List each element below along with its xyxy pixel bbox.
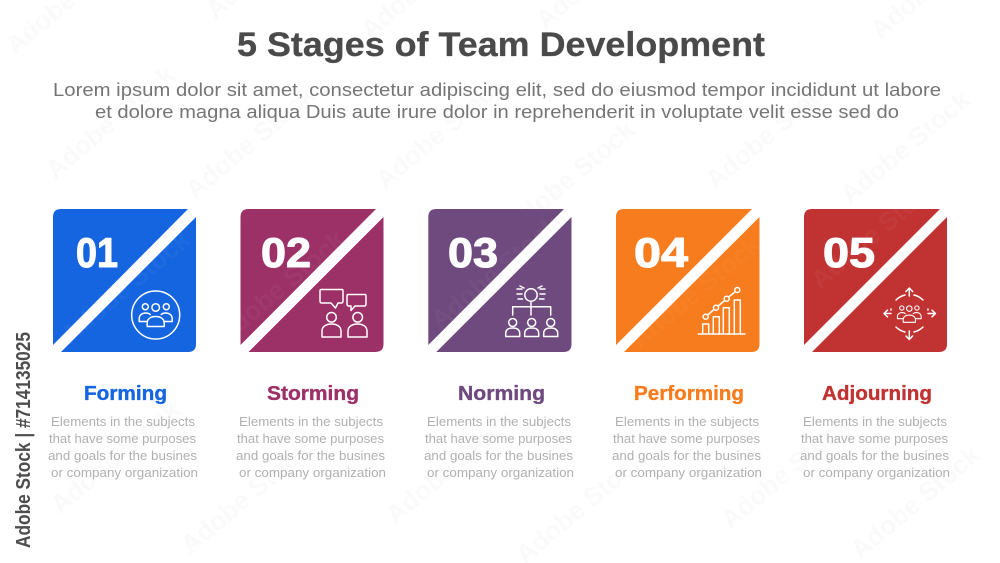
watermark over cards: Adobe Stock [55,224,196,350]
card 03 [428,209,572,352]
description: Adjourning: Elements in the subjects [803,414,948,429]
panel: stage 04 Performing [612,209,762,480]
subtitle text block: et dolore magna aliqua Duis aute irure dolor in reprehenderit in voluptate velit esse sed do [95,101,899,122]
description: Forming: that have some purposes [49,431,196,446]
description: Storming: and goals for the busines [236,448,385,463]
description: Storming: Elements in the subjects [239,414,384,429]
description: Forming: or company organization [51,465,198,480]
panel: stage 03 Norming [424,209,574,480]
description: Norming: and goals for the busines [424,448,573,463]
card 04 [616,209,760,352]
description: Storming: or company organization [239,465,386,480]
description: Norming: that have some purposes [425,431,572,446]
subtitle text block [53,79,941,122]
watermark over cards: Adobe Stock [625,229,766,355]
heading: Storming: Storming [267,383,359,405]
number 04: 04 [634,229,689,276]
heading: Performing: Performing [634,383,744,405]
heading: Adjourning: Adjourning [822,383,932,405]
panel: stage 01 Forming [48,209,198,480]
description: Adjourning: and goals for the busines [800,448,949,463]
card 02 [240,209,384,352]
watermark over cards: Adobe Stock [210,224,351,350]
number 03: 03 [448,229,498,276]
number 02: 02 [261,229,311,276]
description: Storming: that have some purposes [237,431,384,446]
description: Norming: or company organization [427,465,574,480]
description: Norming [424,414,574,480]
icon: leader and team [506,286,558,336]
icon: two people talking [320,290,367,337]
description: Norming: Elements in the subjects [427,414,572,429]
description: Storming [236,414,386,480]
description: Forming [48,414,198,480]
number 01: 01 [76,229,118,276]
card 05 [804,209,947,352]
description: Performing: that have some purposes [613,431,760,446]
description: Forming: Elements in the subjects [51,414,196,429]
panel: stage 02 Storming [236,209,386,480]
subtitle text block: Lorem ipsum dolor sit amet, consectetur adipiscing elit, sed do eiusmod tempor incididunt ut labore [53,79,941,100]
panel: stage 05 Adjourning [800,209,950,480]
watermark over cards [55,169,946,355]
description: Performing: Elements in the subjects [615,414,760,429]
description: Performing: and goals for the busines [612,448,761,463]
title: 5 Stages of Team Development [237,26,765,64]
icon: team in circle [132,291,180,339]
vertical stock credit: Adobe Stock | #714135025 [13,332,35,548]
icon: team with outward arrows [884,288,936,340]
description: Adjourning: or company organization [803,465,950,480]
number 05: 05 [823,229,875,276]
heading: Norming: Norming [458,383,545,405]
description: Adjourning: that have some purposes [801,431,948,446]
icon: growth bar chart [698,288,745,334]
heading: Forming: Forming [84,383,167,405]
card 01 [53,209,196,352]
watermark over cards: Adobe Stock [805,169,946,295]
description: Performing: or company organization [615,465,762,480]
watermark over cards: Adobe Stock [425,209,566,335]
description: Adjourning [800,414,950,480]
description: Performing [612,414,762,480]
description: Forming: and goals for the busines [48,448,197,463]
